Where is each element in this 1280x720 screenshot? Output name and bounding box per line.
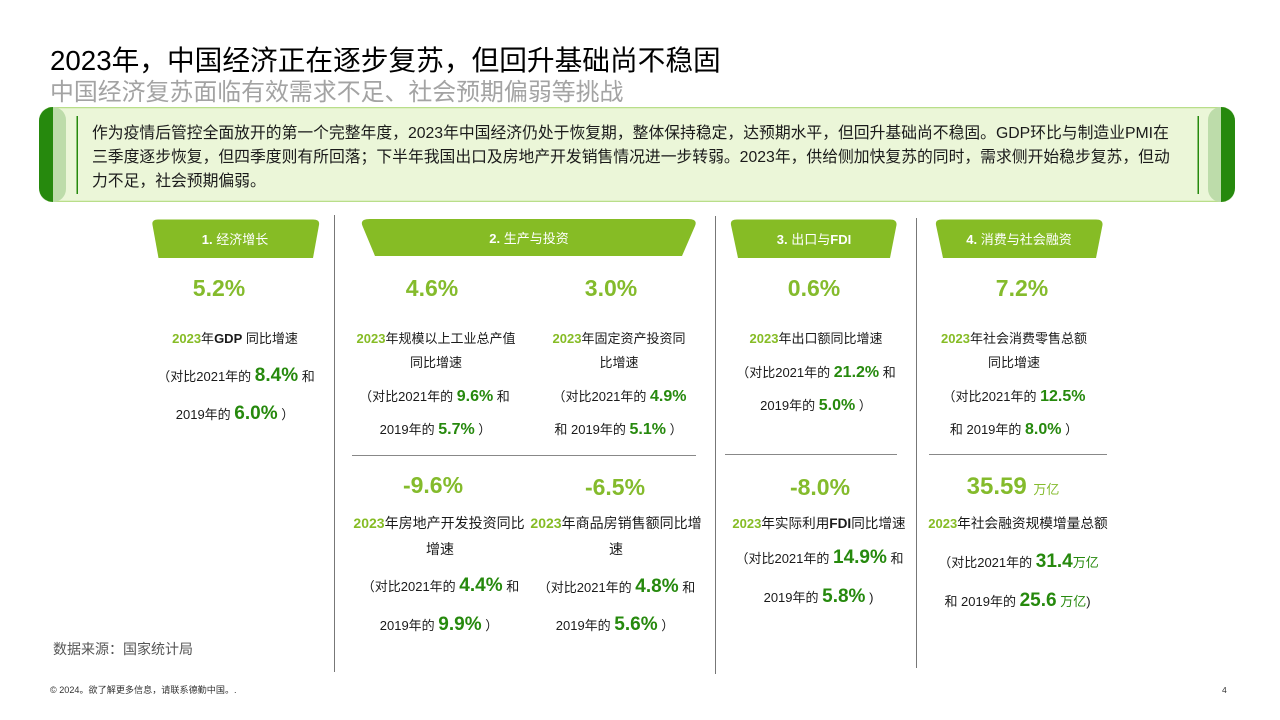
comparison: （对比2021年的 21.2% 和 <box>736 364 896 381</box>
comparison 2019: 2019年的 6.0% ） <box>176 403 294 424</box>
summary text: 三季度逐步恢复，但四季度则有所回落；下半年我国出口及房地产开发销售情况进一步转弱。2023年，供给侧加快复苏的同时，需求侧开始稳步复苏，但动 <box>92 149 1170 166</box>
value 7.2%: 7.2% <box>996 275 1048 301</box>
description retail: 2023年社会消费零售总额 <box>941 331 1087 346</box>
page number: 4 <box>1222 685 1227 695</box>
panel: production and investment <box>353 231 702 635</box>
panel: summary callout <box>39 107 1235 202</box>
text: 和 2019年的 5.1% ） <box>554 421 683 438</box>
text: 同比增速 <box>988 355 1040 370</box>
value 35.59: 35.59 万亿 <box>967 473 1059 500</box>
panel: economic growth <box>157 232 315 424</box>
panel: exports and FDI <box>732 232 906 607</box>
description financing: 2023年社会融资规模增量总额 <box>928 516 1108 531</box>
value 4.6%: 4.6% <box>406 275 458 301</box>
title: 2023年，中国经济正在逐步复苏，但回升基础尚不稳固 <box>50 45 721 76</box>
value 3.0%: 3.0% <box>585 275 637 301</box>
text: 增速 <box>426 541 454 557</box>
value -6.5%: -6.5% <box>585 474 645 500</box>
text: 和 2019年的 8.0% ） <box>950 421 1078 438</box>
text: 速 <box>609 541 623 557</box>
text: 同比增速 <box>410 355 462 370</box>
text: 2019年的 9.9% ） <box>380 614 498 635</box>
heading 3: 3. 出口与FDI <box>777 232 851 247</box>
subtitle: 中国经济复苏面临有效需求不足、社会预期偏弱等挑战 <box>50 79 623 106</box>
comparison: （对比2021年的 9.6% 和 <box>359 388 510 405</box>
value -9.6%: -9.6% <box>403 472 463 498</box>
summary text: 作为疫情后管控全面放开的第一个完整年度，2023年中国经济仍处于恢复期，整体保持稳定，达预期水平，但回升基础尚不稳固。GDP环比与制造业PMI在 <box>92 125 1169 142</box>
value 5.2%: 5.2% <box>193 275 245 301</box>
comparison: （对比2021年的 4.4% 和 <box>362 575 519 596</box>
text: 和 2019年的 25.6 万亿) <box>944 590 1091 611</box>
text: 2019年的 5.7% ） <box>380 421 491 438</box>
data source: 数据来源：国家统计局 <box>53 641 193 657</box>
comparison: （对比2021年的 14.9% 和 <box>735 547 904 568</box>
description FDI: 2023年实际利用FDI同比增速 <box>732 516 906 531</box>
text: 2019年的 5.8% ) <box>764 586 873 607</box>
comparison: （对比2021年的 4.8% 和 <box>538 576 695 597</box>
description industrial output: 2023年规模以上工业总产值 <box>357 331 515 346</box>
comparison: （对比2021年的 4.9% <box>552 388 686 405</box>
text: 2019年的 5.6% ） <box>556 614 674 635</box>
footer: © 2024。欲了解更多信息，请联系德勤中国。. <box>50 685 237 695</box>
value -8.0%: -8.0% <box>790 474 850 500</box>
summary text: 力不足，社会预期偏弱。 <box>92 173 266 190</box>
value 0.6%: 0.6% <box>788 275 840 301</box>
summary text <box>92 124 1170 190</box>
description exports: 2023年出口额同比增速 <box>750 331 882 346</box>
description housing sales: 2023年商品房销售额同比增 <box>530 515 702 531</box>
comparison: （对比2021年的 31.4万亿 <box>938 551 1099 572</box>
comparison 2021: （对比2021年的 8.4% 和 <box>157 365 315 386</box>
heading 4: 4. 消费与社会融资 <box>966 232 1072 247</box>
heading 1: 1. 经济增长 <box>202 232 268 247</box>
comparison: （对比2021年的 12.5% <box>943 388 1085 405</box>
description fixed assets: 2023年固定资产投资同 <box>553 331 685 346</box>
text: 比增速 <box>599 355 638 370</box>
divider lines <box>334 215 335 672</box>
description: 2023年GDP 同比增速 <box>172 331 298 346</box>
text: 2019年的 5.0% ） <box>760 397 872 414</box>
heading 2: 2. 生产与投资 <box>489 231 569 246</box>
panel: consumption and financing <box>928 232 1108 611</box>
description real estate: 2023年房地产开发投资同比 <box>353 515 525 531</box>
